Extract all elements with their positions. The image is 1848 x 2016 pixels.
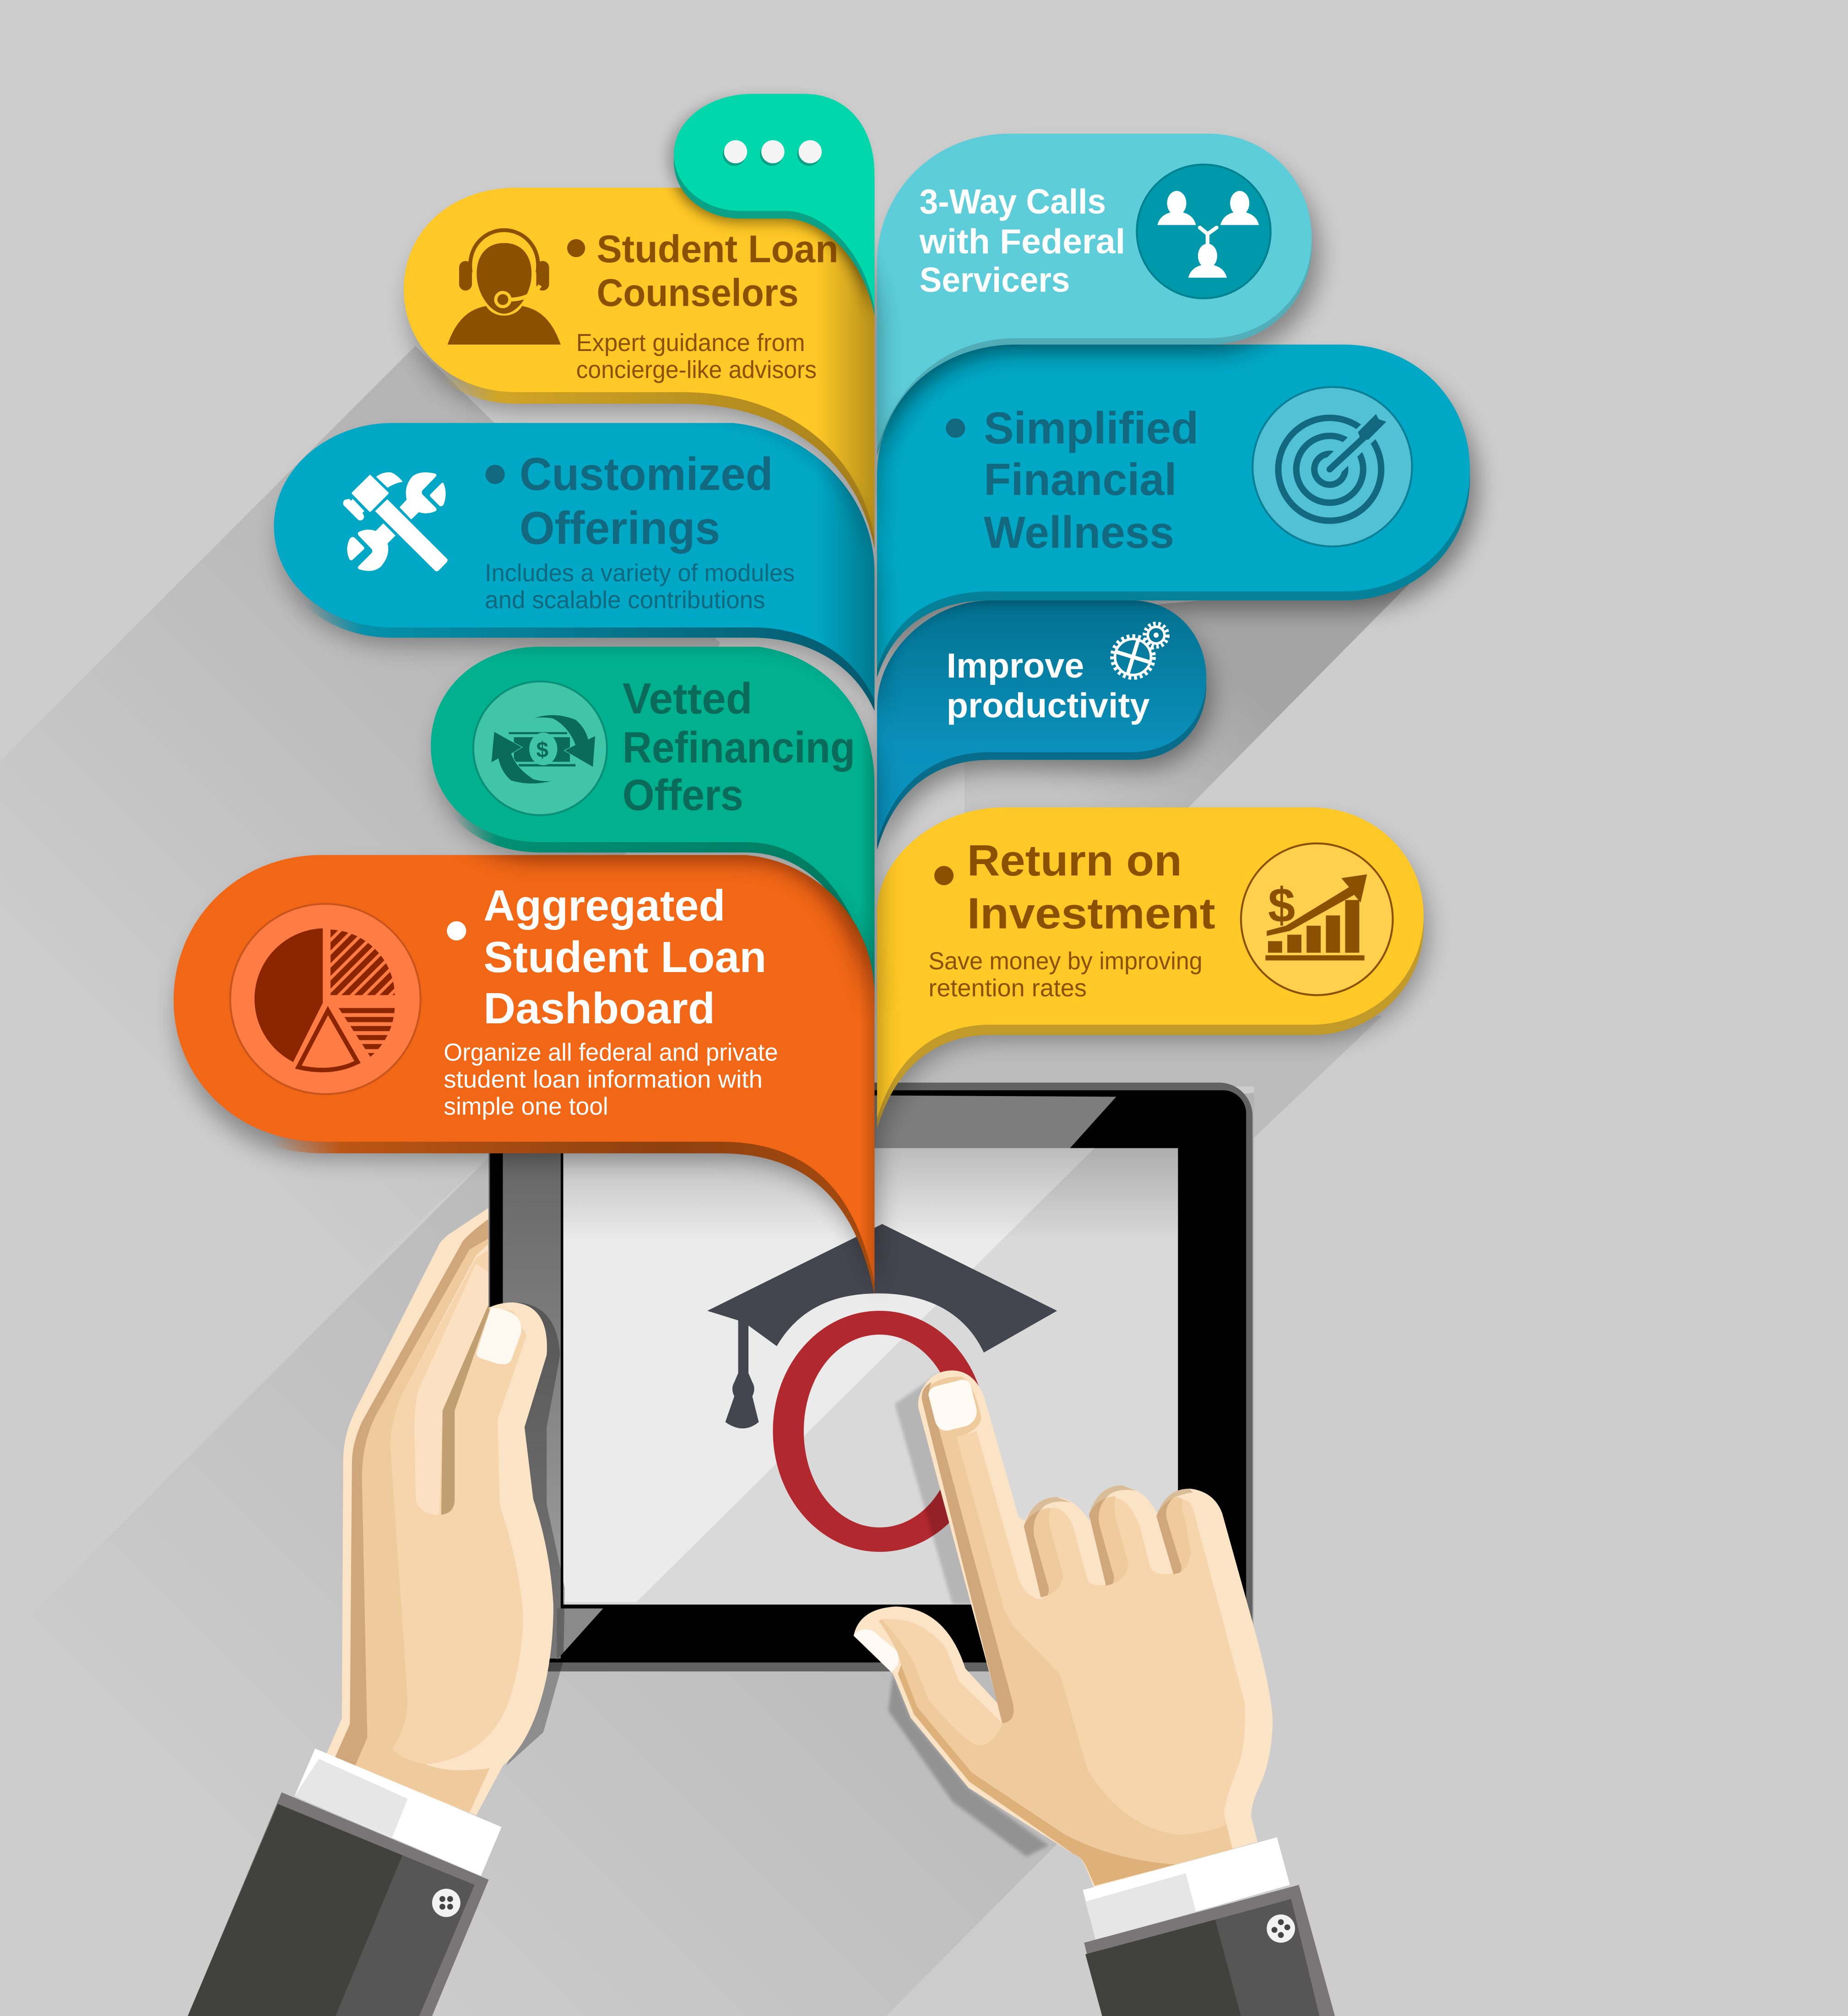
- tablet: [489, 1082, 1252, 1671]
- panel: return on investment: [877, 807, 1429, 1134]
- bezel reflection: [503, 1096, 1116, 1660]
- heading: 3-way calls: with Federal: [919, 222, 1125, 261]
- icon: hammer and wrench: [343, 472, 448, 571]
- icon: growth chart: [1241, 843, 1393, 995]
- description: student loan counselors: concierge-like advisors: [576, 357, 817, 384]
- jacket trim: [188, 1792, 489, 2016]
- panel: customized offerings: [274, 200, 880, 719]
- index side strip: [922, 1382, 1013, 1723]
- bubble body: [274, 435, 880, 1012]
- tablet screen: [563, 1148, 1178, 1605]
- logo ring: [773, 1311, 986, 1552]
- right hand: [854, 1370, 1273, 1887]
- bubble body: [877, 807, 1429, 1134]
- speech bubble with dots: [667, 94, 874, 316]
- icon: gears: [1112, 624, 1168, 678]
- heading: simplified financial wellness: Wellness: [984, 507, 1174, 557]
- left hand: [325, 1208, 565, 1816]
- heading: simplified financial wellness: Financial: [984, 454, 1177, 505]
- panel: 3-way calls: [877, 134, 1319, 468]
- thumb groove light: [414, 1264, 488, 1515]
- bullet: [946, 418, 965, 438]
- panel: vetted refinancing offers: [274, 435, 880, 1012]
- heading: return on investment: Return on: [967, 837, 1182, 885]
- heading: 3-way calls: Servicers: [920, 261, 1070, 300]
- icon: pie chart: [230, 904, 421, 1094]
- description: customized offerings: Includes a variety of modules: [485, 560, 795, 587]
- bubble body: [404, 107, 880, 556]
- heading: vetted refinancing offers: Offers: [623, 771, 743, 820]
- icon: target: [1252, 387, 1412, 546]
- icon: money exchange: [473, 681, 607, 815]
- heading: vetted refinancing offers: Vetted: [623, 675, 752, 723]
- bullet: [486, 465, 505, 484]
- finger three: [1156, 1489, 1193, 1574]
- palm shade: [355, 1238, 490, 1813]
- hand side tone: [335, 1219, 488, 1766]
- description: student loan counselors: Expert guidance from: [576, 330, 805, 357]
- hand cast shadows: [889, 1373, 1049, 1856]
- heading: aggregated student loan dashboard: Dashboard: [483, 984, 715, 1033]
- description: aggregated student loan dashboard: Organize all federal and private: [444, 1039, 778, 1066]
- panel: aggregated student loan dashboard: [173, 662, 878, 1300]
- icon: headset agent: [448, 230, 561, 345]
- long shadows: [0, 346, 1411, 2016]
- heading: improve productivity: Improve: [947, 647, 1084, 686]
- bullet: [567, 239, 585, 257]
- bubble body: [274, 200, 880, 719]
- heading: student loan counselors: Student Loan: [597, 227, 839, 270]
- heading: improve productivity: productivity: [947, 686, 1150, 725]
- hand shadow: [506, 1303, 565, 1766]
- bubble body: [877, 134, 1319, 468]
- jacket: [1085, 1919, 1241, 2016]
- description: aggregated student loan dashboard: student loan information with: [444, 1066, 763, 1093]
- jacket: [188, 1804, 402, 2016]
- panel: student loan counselors: [404, 107, 880, 556]
- button: [432, 1889, 461, 1917]
- lower palm tan: [898, 1665, 1176, 1886]
- index nail: [928, 1379, 977, 1431]
- icon: graduation cap: [707, 1224, 1057, 1428]
- heading: aggregated student loan dashboard: Student Loan: [483, 933, 766, 982]
- panel: improve productivity: [877, 355, 1470, 859]
- heading: simplified financial wellness: Simplified: [984, 403, 1198, 453]
- hand outline: [325, 1208, 553, 1816]
- right sleeve: [1083, 1838, 1335, 2016]
- bullet: [447, 921, 466, 940]
- shirt cuff: [1083, 1838, 1290, 1940]
- heading: customized offerings: Offerings: [520, 502, 720, 554]
- icon: money exchange: $: [536, 738, 548, 762]
- bullet: [934, 866, 954, 885]
- hand silhouette: [854, 1370, 1273, 1887]
- thumb nail: [854, 1629, 899, 1672]
- palm and index shade: [878, 1377, 1233, 1865]
- bubble body: [868, 600, 1223, 851]
- description: customized offerings: and scalable contributions: [485, 587, 765, 614]
- tablet body: [489, 1082, 1252, 1671]
- description: aggregated student loan dashboard: simple one tool: [444, 1093, 608, 1120]
- heading: vetted refinancing offers: Refinancing: [623, 724, 855, 772]
- heading: aggregated student loan dashboard: Aggregated: [483, 881, 725, 930]
- icon: three people: [1137, 165, 1271, 298]
- screen highlight: [563, 1148, 1095, 1602]
- palm main: [390, 1250, 526, 1764]
- heading: customized offerings: Customized: [520, 448, 773, 500]
- tablet bezel: [490, 1090, 1246, 1662]
- heading: student loan counselors: Counselors: [597, 271, 799, 314]
- jacket trim: [1084, 1885, 1335, 2016]
- thumb nail: [477, 1308, 521, 1364]
- bubble body: [173, 662, 878, 1300]
- heading: 3-way calls: 3-Way Calls: [920, 182, 1106, 221]
- icon: growth chart: $: [1268, 877, 1295, 932]
- three dots: [723, 140, 822, 166]
- description: return on investment: Save money by improving: [928, 948, 1203, 975]
- heading: return on investment: Investment: [967, 889, 1215, 938]
- thumb face: [882, 1619, 1003, 1745]
- palm main: [956, 1432, 1245, 1835]
- bubble body: [872, 344, 1491, 677]
- description: return on investment: retention rates: [928, 975, 1087, 1002]
- finger two: [1089, 1486, 1137, 1586]
- shirt cuff: [294, 1749, 502, 1876]
- panel: simplified financial wellness: [872, 344, 1491, 677]
- left sleeve: [188, 1749, 502, 2016]
- thumb groove dark: [441, 1305, 490, 1515]
- finger one: [1024, 1497, 1071, 1597]
- button: [1267, 1914, 1295, 1943]
